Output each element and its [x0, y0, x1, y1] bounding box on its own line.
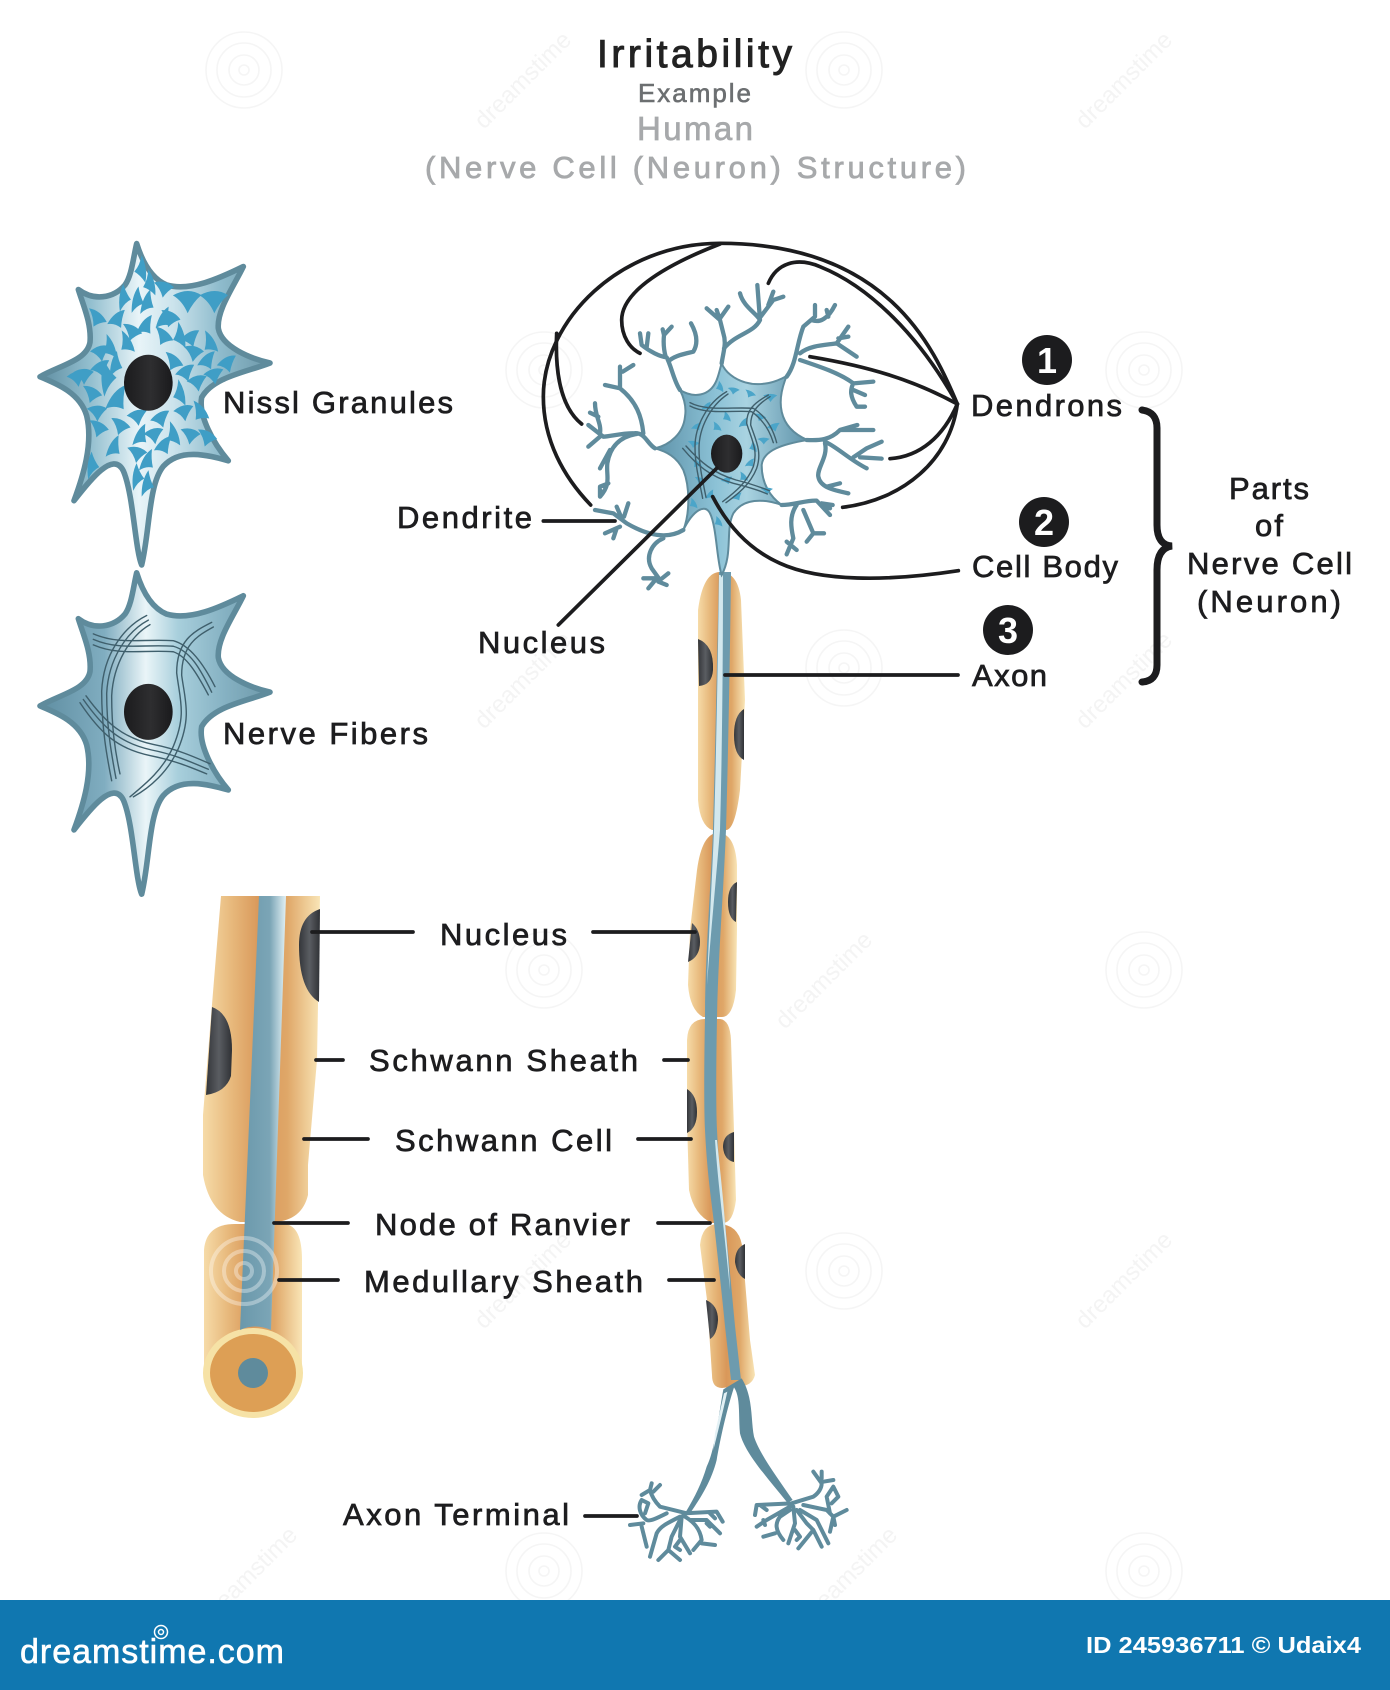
panel: nerve fibers cell	[40, 573, 270, 894]
callout: node of ranvier: Node of Ranvier	[375, 1207, 630, 1242]
soma	[655, 363, 807, 575]
nucleus upper right	[299, 909, 320, 1002]
cut end axon	[238, 1358, 268, 1388]
granules	[67, 255, 238, 502]
upper schwann cell	[203, 896, 320, 1222]
cell body outline	[40, 573, 270, 894]
callout: schwann cell: Schwann Cell	[395, 1123, 612, 1158]
label: nissl granules: Nissl Granules	[223, 385, 453, 420]
brace	[1142, 410, 1172, 682]
number badge 3	[983, 605, 1033, 655]
left terminal tree	[630, 1483, 723, 1560]
neuron axon	[704, 572, 741, 1380]
schwann cell 4	[700, 1224, 755, 1388]
label: dendrite: Dendrite	[397, 500, 532, 535]
soma fibers	[683, 392, 777, 503]
logo text: dreamstime.com	[20, 1633, 284, 1671]
label: parts of nerve cell: Nerve Cell	[1187, 546, 1352, 581]
watermark spirals: dreamstime	[469, 26, 577, 134]
label: dendrons: Dendrons	[971, 388, 1122, 423]
watermark spirals: dreamstime	[1070, 1226, 1178, 1334]
fibers	[80, 615, 215, 797]
label: nucleus upper: Nucleus	[478, 625, 605, 660]
lower schwann cell	[204, 1224, 302, 1373]
watermark spirals: dreamstime	[469, 626, 577, 734]
number badge 2	[1019, 497, 1069, 547]
soma nucleus	[711, 435, 742, 473]
watermark spirals: dreamstime	[1070, 26, 1178, 134]
nucleus	[124, 684, 173, 740]
panel: nissl granules cell	[40, 244, 270, 565]
right terminal tree	[755, 1472, 847, 1548]
number badge 1: 1	[1037, 340, 1057, 381]
label: parts of nerve cell	[1187, 471, 1352, 619]
panel: magnified axon section	[203, 896, 320, 1418]
fork highlight	[713, 1392, 727, 1450]
axon highlights	[707, 575, 730, 1290]
number badge 2: 2	[1034, 502, 1054, 543]
watermark spirals: dreamstime	[469, 1226, 577, 1334]
axon fork	[686, 1378, 793, 1513]
subtitle: example: Example	[638, 78, 751, 108]
callout: medullary sheath: Medullary Sheath	[364, 1264, 643, 1299]
cut end outer ring	[203, 1328, 303, 1418]
title block	[425, 33, 966, 185]
label: parts of nerve cell: of	[1255, 508, 1283, 543]
label: axon: Axon	[972, 658, 1047, 693]
axon core	[240, 896, 286, 1330]
callout: nucleus (schwann): Nucleus	[440, 917, 567, 952]
number badge 1	[1022, 335, 1072, 385]
neuron soma and dendrites	[588, 285, 882, 588]
logo spiral	[154, 1626, 168, 1638]
cut end myelin	[210, 1334, 296, 1412]
subtitle: human: Human	[637, 110, 753, 147]
axon leader line	[725, 673, 958, 677]
subtitle: nerve cell structure: (Nerve Cell (Neuron) Structure)	[425, 150, 966, 185]
watermark spirals: dreamstime	[795, 1521, 903, 1629]
panel: main axon with schwann cells	[687, 572, 755, 1388]
leader lines from parts of neuron	[543, 243, 958, 625]
schwann cell 3	[687, 1019, 736, 1223]
nucleus	[124, 355, 173, 411]
watermark spirals: dreamstime	[195, 1521, 303, 1629]
watermark spirals: dreamstime	[770, 926, 878, 1034]
schwann cell 2	[688, 833, 737, 1017]
label: parts of nerve cell: (Neuron)	[1197, 584, 1341, 619]
title: Irritability	[597, 33, 792, 76]
label: cell body: Cell Body	[972, 549, 1118, 584]
number badge 3: 3	[998, 610, 1018, 651]
dendrite branches	[588, 285, 882, 588]
axon terminals	[630, 1378, 847, 1560]
label: parts of nerve cell: Parts	[1229, 471, 1309, 506]
watermark spirals	[195, 26, 1182, 1629]
nuclei	[687, 639, 745, 1339]
schwann cell 1	[698, 572, 745, 830]
label: axon terminal: Axon Terminal	[343, 1497, 569, 1532]
watermark spirals: dreamstime	[1070, 626, 1178, 734]
callout: schwann sheath: Schwann Sheath	[369, 1043, 638, 1078]
nucleus left	[206, 1007, 232, 1095]
image id credit: ID 245936711 © Udaix4	[1086, 1632, 1361, 1658]
soma granules	[686, 380, 781, 529]
cell body outline	[40, 244, 270, 565]
label: nerve fibers: Nerve Fibers	[223, 716, 428, 751]
watermark over axon	[211, 1238, 277, 1304]
footer banner	[0, 1600, 1390, 1690]
